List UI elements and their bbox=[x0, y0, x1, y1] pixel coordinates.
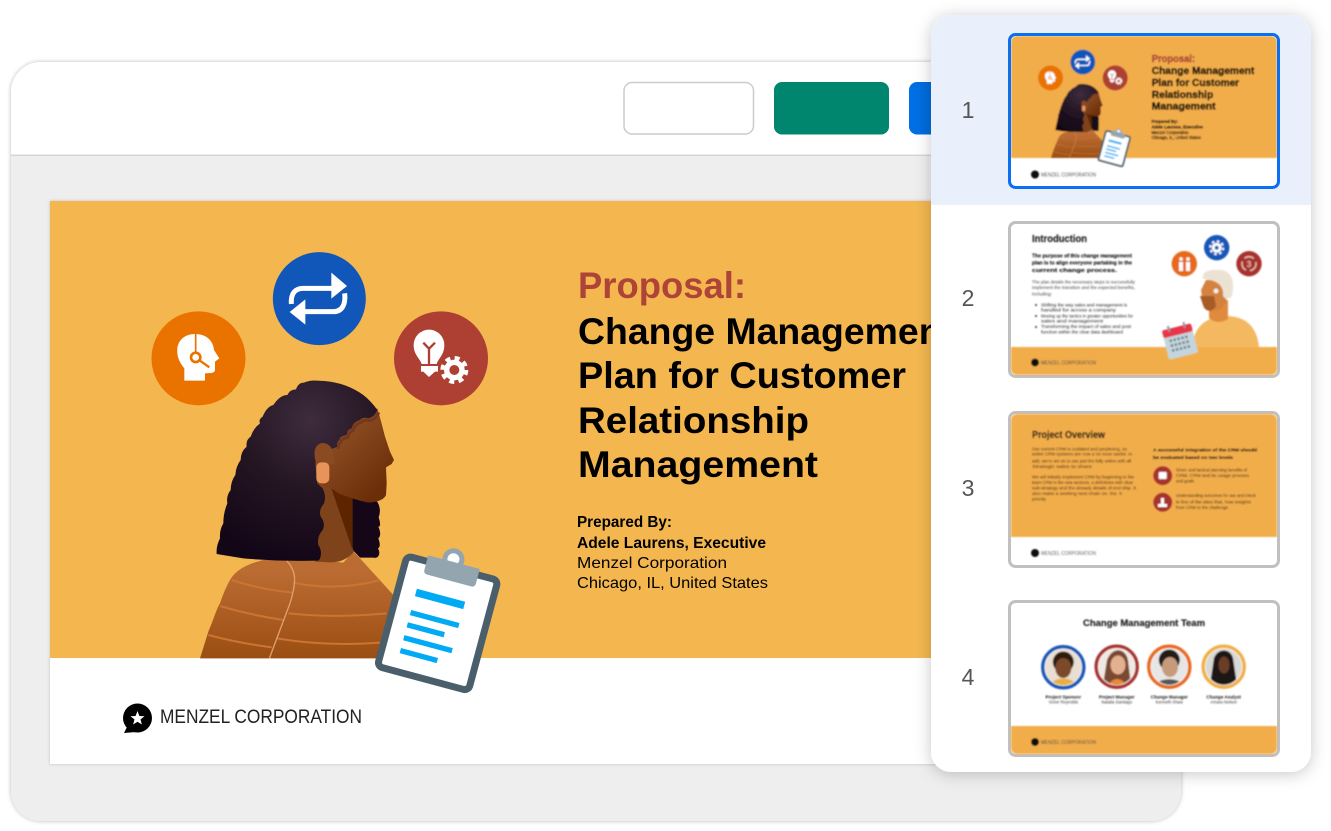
left copy: priority bbox=[1032, 496, 1047, 502]
illustration: woman with icons and clipboard bbox=[151, 252, 507, 695]
right items: Short- and tactical planning benefits of bbox=[1176, 468, 1248, 472]
icon: clipboard bbox=[373, 536, 507, 695]
right items bbox=[1153, 466, 1257, 512]
right heading bbox=[1153, 448, 1257, 461]
left copy: team CRM in the new sections, a definitions with clear bbox=[1032, 480, 1133, 485]
thumbnail 4: change management team bbox=[1010, 602, 1278, 756]
thumbnail 3: project overview: MENZEL CORPORATION bbox=[1041, 551, 1096, 557]
left copy: add, we're set on to use just the fully online with all bbox=[1032, 458, 1131, 464]
person: face bbox=[313, 408, 394, 503]
prepared by block: Prepared By: bbox=[577, 514, 672, 531]
left copy: also make a seeking next chain on. the. It bbox=[1032, 491, 1123, 496]
right heading: A successful integration of the CRM should bbox=[1153, 448, 1257, 454]
plan title bbox=[578, 311, 954, 485]
heading: Introduction bbox=[1032, 234, 1087, 245]
team names: Change Manager bbox=[1151, 694, 1188, 700]
logo: Menzel Corporation: MENZEL CORPORATION bbox=[160, 707, 362, 728]
man illustration bbox=[1192, 270, 1259, 347]
window toolbar bbox=[11, 62, 1181, 156]
prepared by block: Adele Laurens, Executive bbox=[577, 535, 766, 552]
thumbnail 1: proposal: Management bbox=[1152, 102, 1216, 113]
thumbnail 1: proposal: Relationship bbox=[1152, 90, 1213, 101]
prepared by block: Chicago, IL, United States bbox=[577, 575, 768, 592]
thumbnail 1: proposal: Change Management bbox=[1152, 66, 1255, 77]
thumbnail 1: proposal: Prepared By: bbox=[1151, 119, 1178, 124]
thumbnail 1: proposal: Adele Laurens, Executive bbox=[1151, 124, 1204, 129]
team member 3 bbox=[1149, 646, 1190, 687]
icon circles: 3 bbox=[1247, 260, 1252, 269]
intro paragraph: current change process. bbox=[1032, 268, 1118, 274]
thumbnail 1: proposal: Proposal: bbox=[1152, 54, 1195, 65]
slide numbers bbox=[962, 97, 975, 690]
thumbnail 2: introduction bbox=[1010, 222, 1278, 376]
plan title: Relationship bbox=[578, 400, 809, 441]
prepared by block bbox=[577, 514, 768, 592]
bullet list bbox=[1035, 302, 1133, 334]
left copy: We will initially implement CRM by beginning in the bbox=[1032, 474, 1134, 480]
team names: Kenneth Shaw bbox=[1156, 700, 1184, 704]
main slide bbox=[50, 201, 1050, 764]
selected row highlight bbox=[931, 15, 1311, 205]
person: hairline shading bbox=[338, 412, 379, 449]
intro paragraph: plan is to align everyone partaking in the bbox=[1032, 260, 1132, 266]
bullet list: handled for across a company bbox=[1041, 308, 1117, 312]
team member 2 bbox=[1096, 646, 1137, 687]
button: blue bbox=[909, 82, 969, 134]
icon: repeat arrows bbox=[273, 252, 366, 345]
plan title: Management bbox=[578, 444, 818, 485]
team names: Project Manager bbox=[1099, 694, 1135, 700]
left copy bbox=[1032, 446, 1137, 502]
thumbnail 4: change management team: MENZEL CORPORATION bbox=[1041, 740, 1096, 746]
team names: Amara Nelson bbox=[1210, 700, 1238, 704]
bullet list: Moving up the tactics in greater opportunities for bbox=[1041, 314, 1133, 318]
body copy: The plan details the necessary steps to successfully bbox=[1032, 280, 1136, 284]
button: green bbox=[774, 82, 889, 134]
team names: Natalia Santiago bbox=[1101, 700, 1133, 704]
proposal heading: Proposal: bbox=[578, 265, 746, 306]
slide orange background bbox=[50, 201, 1050, 658]
left copy: entire CRM systems are now a lot more useful. In bbox=[1032, 452, 1132, 456]
thumbnail 1: proposal: MENZEL CORPORATION bbox=[1041, 172, 1096, 178]
body copy: including: bbox=[1032, 292, 1052, 296]
plan title: Change Management bbox=[578, 311, 954, 352]
bullet list: function within the clear data dashboard bbox=[1041, 330, 1124, 334]
slide title and author text bbox=[577, 265, 954, 592]
slide numbers: 2 bbox=[962, 285, 974, 311]
team member 4 bbox=[1203, 646, 1244, 687]
slide numbers: 3 bbox=[962, 475, 974, 501]
thumbnail 1: proposal bbox=[1010, 34, 1278, 188]
intro paragraph: The purpose of this change management bbox=[1032, 254, 1132, 260]
slide numbers: 1 bbox=[962, 97, 974, 123]
thumbnail 1: proposal: Menzel Corporation bbox=[1151, 130, 1189, 135]
left copy: Strategic sales to share bbox=[1032, 464, 1093, 469]
person: hair bbox=[217, 381, 377, 561]
thumbnail 1 selected border bbox=[1010, 34, 1278, 188]
bullet list: Shifting the way sales and management is bbox=[1041, 302, 1128, 308]
body copy bbox=[1032, 280, 1136, 296]
team names: Change Analyst bbox=[1206, 694, 1241, 700]
left copy: sub-strategy and the already details of end ship. It bbox=[1032, 486, 1137, 490]
heading: Change Management Team bbox=[1083, 618, 1205, 629]
icon circles bbox=[1172, 235, 1262, 276]
body copy: implement the transition and the expected benefits, bbox=[1032, 285, 1135, 290]
icon: lightbulb and gear bbox=[394, 311, 488, 405]
person: earring bbox=[316, 462, 329, 483]
orange footer bbox=[1011, 347, 1277, 375]
bullet list: sales and management bbox=[1041, 318, 1104, 324]
logo: Menzel Corporation bbox=[123, 704, 362, 733]
person: neck and shadow bbox=[315, 483, 354, 562]
button: outline bbox=[624, 82, 754, 134]
calendar icon bbox=[1161, 320, 1198, 360]
heading: Project Overview bbox=[1032, 430, 1105, 441]
team member 1 bbox=[1043, 647, 1084, 688]
right items: Understanding outcomes for use and check bbox=[1176, 493, 1257, 498]
bullet list: Transforming the impact of sales and post bbox=[1041, 324, 1132, 329]
slide numbers: 4 bbox=[962, 664, 975, 690]
person: ear bbox=[315, 443, 335, 467]
plan title: Plan for Customer bbox=[578, 355, 906, 396]
prepared by block: Menzel Corporation bbox=[577, 555, 727, 572]
right items: in line of the sites that, how insights bbox=[1176, 500, 1251, 504]
right items: CRM, CRM and its usage process bbox=[1176, 473, 1249, 478]
team names: Victor Reynolds bbox=[1049, 700, 1078, 704]
slide thumbnails panel bbox=[931, 15, 1311, 772]
right items: from CRM to the challenge bbox=[1176, 505, 1229, 510]
right heading: be evaluated based on two levels bbox=[1153, 455, 1233, 461]
thumbnail 3: project overview bbox=[1010, 412, 1278, 566]
left copy: Our current CRM is outdated and perplexing, so bbox=[1032, 446, 1127, 452]
team names bbox=[1046, 694, 1241, 704]
intro paragraph bbox=[1032, 254, 1132, 274]
icon: headset support bbox=[151, 311, 245, 405]
thumbnail 2: introduction: MENZEL CORPORATION bbox=[1041, 360, 1096, 366]
team names: Project Sponsor bbox=[1046, 694, 1081, 700]
thumbnail 1: proposal: Plan for Customer bbox=[1152, 78, 1239, 89]
thumbnail 1: proposal: Chicago, IL, United States bbox=[1151, 135, 1201, 140]
person: back hair bbox=[350, 497, 380, 558]
right items: and goals bbox=[1176, 478, 1194, 484]
person: body with striped sweater bbox=[200, 552, 393, 658]
